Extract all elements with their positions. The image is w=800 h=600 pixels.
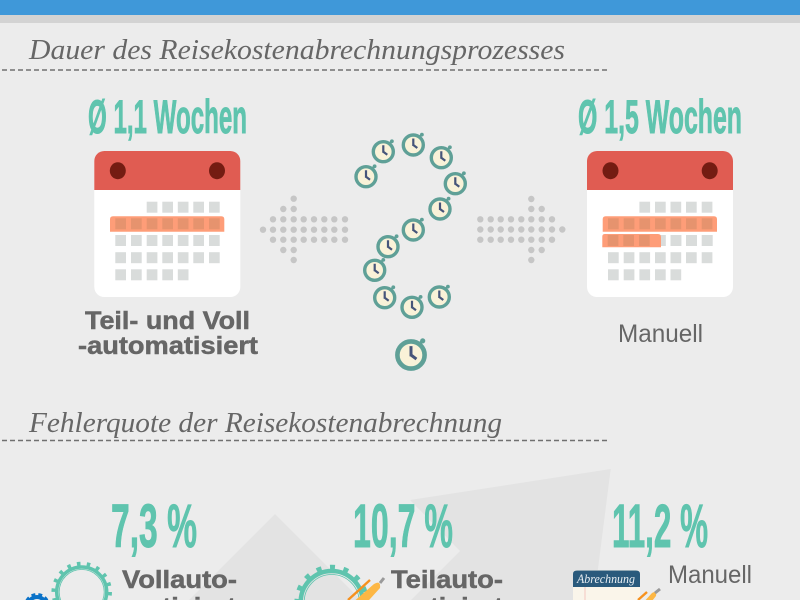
label: Vollautomatisiert: [122, 570, 236, 600]
label: Teil- und Vollautomatisiert: -automatisiert: [78, 332, 259, 360]
label: Teil- und Vollautomatisiert: [78, 307, 259, 360]
icon: question mark of stopwatches: [356, 133, 466, 369]
stat: 10,7 %: 10,7 %: [353, 492, 453, 560]
background shapes: [189, 469, 611, 600]
heading: error rate: Fehlerquote der Reisekostenabrechnung: [28, 408, 502, 439]
stat: 7,3 %: 7,3 %: [111, 492, 197, 560]
header band: [0, 0, 800, 23]
label: Manuell: Manuell: [618, 320, 703, 348]
arrow: dotted right: [477, 196, 566, 263]
icon: gears: [26, 564, 110, 600]
icon: calendar right: [587, 151, 733, 297]
stat: 11,2 %: 11,2 %: [612, 492, 708, 560]
icon: notepad with pen: [573, 570, 660, 600]
label: Vollautomatisiert: Vollauto-: [122, 566, 237, 594]
arrow: dotted left: [260, 196, 348, 263]
label: Teilautomatisiert: [391, 570, 502, 600]
heading: duration: Dauer des Reisekostenabrechnungsprozesses: [28, 35, 565, 66]
label: Manuell bottom: Manuell: [668, 561, 752, 589]
stat: 1,1 Wochen: Ø 1,1 Wochen: [88, 90, 247, 143]
icon: calendar left: [94, 151, 240, 297]
icon: notepad with pen: Abrechnung: [576, 571, 635, 586]
label: Teil- und Vollautomatisiert: Teil- und Voll: [85, 307, 250, 335]
label: Teilautomatisiert: Teilauto-: [391, 566, 503, 594]
icon: gear with pen: [297, 568, 384, 600]
